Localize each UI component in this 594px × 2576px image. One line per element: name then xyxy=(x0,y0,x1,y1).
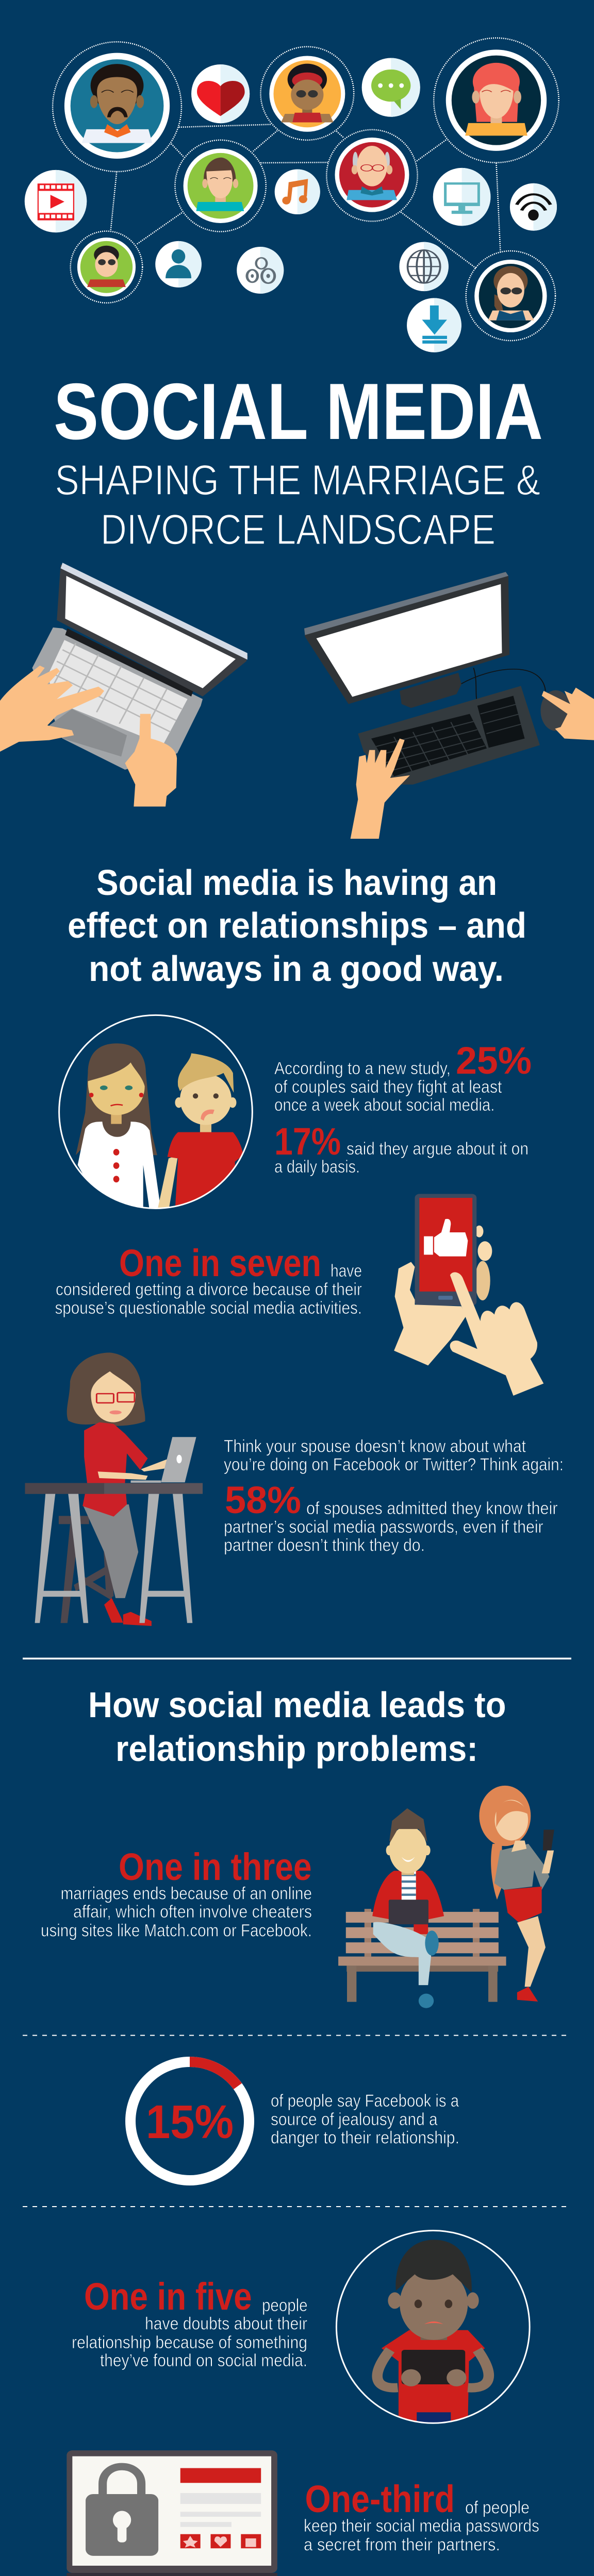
stat: 25 percent and 17 percent: once a week about social media. xyxy=(274,1095,495,1115)
icon: download arrow xyxy=(407,298,461,352)
avatar: woman with red headband xyxy=(260,47,354,140)
stat: 25 percent and 17 percent: said they argue about it on xyxy=(346,1139,529,1159)
illustration: hands holding phone with thumbs up xyxy=(394,1194,543,1396)
icon: video film strip xyxy=(25,170,87,232)
heading: effect on relationships xyxy=(68,862,526,989)
stat value 17%: 17% xyxy=(274,1120,341,1163)
avatar: woman with red hair xyxy=(434,38,559,163)
stat: 58 percent know partner passwords: partner’s social media passwords, even if their xyxy=(224,1517,543,1537)
stat: one in three: using sites like Match.com or Facebook. xyxy=(41,1921,312,1941)
avatar: man in sunglasses xyxy=(71,231,142,303)
stat: one in seven: considered getting a divorce because of their xyxy=(56,1280,362,1299)
illustration: couple on park bench with devices xyxy=(338,1786,554,2008)
stat: one in five xyxy=(72,2275,308,2370)
avatar: bald man with red glasses xyxy=(326,130,418,221)
stat: one-third xyxy=(304,2478,539,2555)
stat: 58 percent know partner passwords: partner doesn’t think they do. xyxy=(224,1536,425,1555)
icon: gears xyxy=(237,247,284,294)
illustration: social network of avatars and icons xyxy=(25,38,559,352)
title block xyxy=(54,367,543,553)
stat: 25 percent and 17 percent: of couples said they fight at least xyxy=(274,1077,502,1097)
icon: chat bubble xyxy=(362,58,420,117)
illustration: hands on laptop xyxy=(0,563,248,806)
heading: effect on relationships: not always in a good way. xyxy=(89,948,504,989)
stat: 25 percent and 17 percent xyxy=(274,1039,532,1177)
stat value 25%: 25% xyxy=(456,1039,532,1082)
stat value 58%: 58% xyxy=(225,1479,301,1521)
stat: one in seven: have xyxy=(331,1261,362,1281)
stat: 15 percent donut: source of jealousy and a xyxy=(271,2110,438,2129)
stat: 15 percent donut: danger to their relationship. xyxy=(271,2128,459,2147)
stat value 15%: 15% xyxy=(146,2096,234,2148)
stat: one in three: marriages ends because of an online xyxy=(61,1884,312,1904)
stat: one in five: One in five xyxy=(84,2275,252,2318)
avatar: man with afro xyxy=(53,42,182,172)
stat: 15 percent donut xyxy=(130,2062,459,2180)
stat: 25 percent and 17 percent: a daily basis. xyxy=(274,1157,360,1177)
stat: one-third: One-third xyxy=(305,2478,455,2520)
stat: 15 percent donut: of people say Facebook is a xyxy=(271,2091,459,2111)
illustration: worried boy with tablet xyxy=(336,2231,530,2426)
divider xyxy=(23,2036,571,2207)
stat: one in five: relationship because of something xyxy=(72,2333,307,2352)
stat: 58 percent know partner passwords: Think your spouse doesn’t know about what xyxy=(224,1437,526,1456)
stat: one in three xyxy=(41,1845,312,1941)
avatar: woman with braid xyxy=(466,251,555,341)
stat: one in five: they’ve found on social media. xyxy=(100,2351,307,2370)
stat: one in five: people xyxy=(262,2296,308,2315)
stat: 58 percent know partner passwords: of spouses admitted they know their xyxy=(306,1499,558,1518)
subtitle xyxy=(55,456,540,553)
icon: wifi signal xyxy=(510,183,557,231)
donut chart xyxy=(130,2062,249,2180)
icon: heart xyxy=(191,64,250,123)
stat: one-third: of people xyxy=(465,2498,530,2518)
icon: computer monitor xyxy=(433,168,490,226)
icon: user silhouette xyxy=(155,241,202,287)
stat: one in five: have doubts about their xyxy=(145,2314,307,2334)
avatar: young man with green background xyxy=(175,140,266,232)
stat: one-third: keep their social media passwords xyxy=(304,2516,539,2536)
heading: effect on relationships: effect on relationships – and xyxy=(68,905,526,945)
illustration: hands on desktop computer xyxy=(304,572,594,839)
network connector lines xyxy=(111,125,501,268)
stat: one in three: One in three xyxy=(119,1845,312,1888)
stat: one in seven: spouse’s questionable social media activities. xyxy=(55,1298,362,1318)
illustration: laptop with padlock xyxy=(51,2450,292,2576)
heading: how social media leads to problems: How social media leads to xyxy=(88,1685,506,1725)
stat: 25 percent and 17 percent: According to a new study, xyxy=(274,1059,451,1078)
subtitle: DIVORCE LANDSCAPE xyxy=(101,505,496,553)
stat: 58 percent know partner passwords xyxy=(224,1437,564,1555)
illustration: unhappy couple in circle xyxy=(59,1015,252,1211)
stat: one in seven: One in seven xyxy=(119,1242,321,1284)
heading: how social media leads to problems xyxy=(88,1685,506,1769)
heading: effect on relationships: Social media is having an xyxy=(96,862,497,903)
illustration: woman at standing desk with laptop xyxy=(25,1352,203,1626)
stat: one in three: affair, which often involve cheaters xyxy=(73,1902,312,1922)
heading: how social media leads to problems: relationship problems: xyxy=(116,1728,478,1769)
stat: one-third: a secret from their partners. xyxy=(304,2535,500,2555)
icon: globe xyxy=(399,242,449,291)
icon: padlock xyxy=(86,2467,158,2556)
icon: music note xyxy=(275,170,320,214)
stat: one in seven xyxy=(55,1242,362,1318)
